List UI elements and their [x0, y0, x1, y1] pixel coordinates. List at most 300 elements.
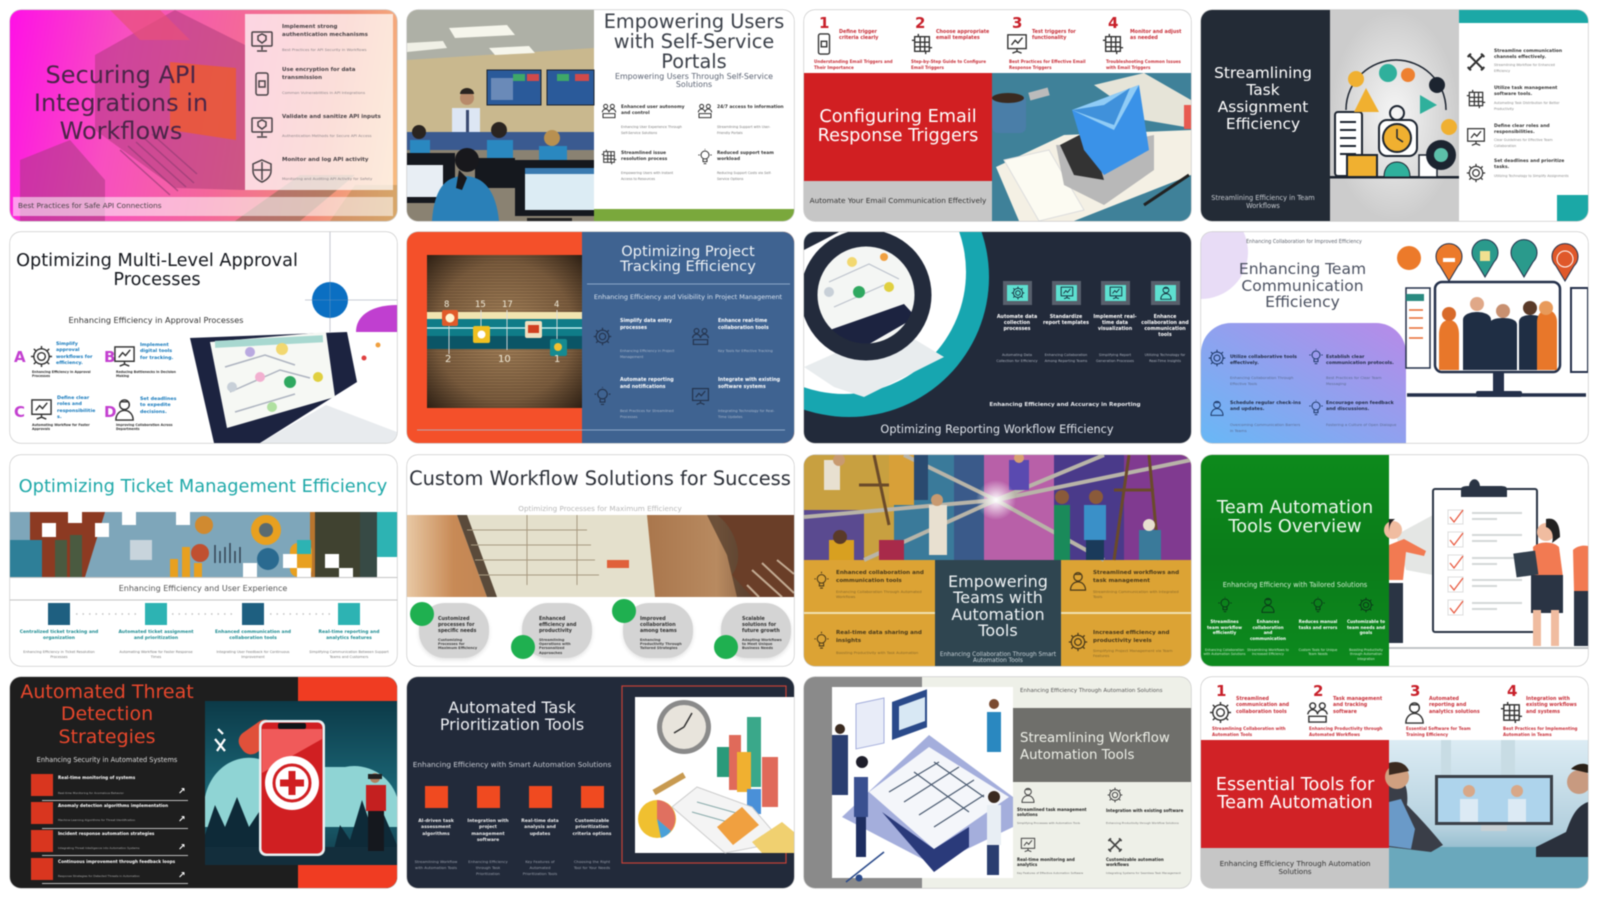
step 2: [1042, 281, 1090, 367]
item: task management: [1017, 787, 1102, 827]
caption: [1009, 59, 1086, 70]
heading: assessment: [421, 825, 451, 830]
caption: Access to Resources: [621, 177, 655, 181]
letter: A: [14, 348, 26, 366]
photo: analyst at screen: [407, 455, 794, 666]
heading: [13, 630, 105, 642]
heading: report templates: [1043, 321, 1089, 326]
title: Tools: [978, 621, 1018, 640]
illustration: team on monitor: [1201, 232, 1588, 443]
heading: [936, 28, 990, 41]
caption: Business Needs: [742, 646, 773, 650]
heading: [1017, 806, 1087, 816]
heading: reporting and: [1429, 703, 1466, 708]
icon tile: [145, 603, 167, 625]
heading: [1017, 856, 1075, 866]
caption: Simplifying Report: [1099, 353, 1131, 357]
caption: Enhancing Efficiency in Project: [620, 349, 674, 353]
heading: Define clear roles and: [1494, 124, 1550, 129]
heading: productivity: [539, 629, 572, 634]
item: integrate: [691, 378, 790, 420]
title: Automation Tools: [1020, 748, 1134, 763]
number: 4: [1108, 14, 1118, 32]
caption: Best Practices for Implementing: [1503, 726, 1577, 731]
caption: Authentication Methods for Secure API Access: [282, 133, 372, 138]
caption: Features: [1093, 653, 1109, 658]
caption: [1309, 726, 1382, 737]
heading: [566, 819, 618, 838]
caption: with Automation Solutions: [1204, 652, 1246, 656]
heading: organization: [43, 636, 75, 641]
title: [7, 252, 307, 290]
step 4: [1500, 683, 1588, 740]
icon: [1260, 597, 1276, 613]
caption: Machine Learning Algorithms for Threat Identification: [58, 818, 135, 822]
caption: Enhancing Efficiency in Approval: [32, 370, 91, 374]
icon: bulb: [813, 631, 830, 651]
panel: Optimizing Reporting Workflow Efficiency: [804, 232, 1191, 443]
heading: [57, 396, 95, 421]
heading: Customized: [438, 617, 470, 622]
title: Team Automation: [1217, 793, 1373, 813]
item: incident: [31, 830, 188, 857]
title: [1195, 498, 1395, 536]
heading: [1093, 569, 1179, 585]
heading: [410, 819, 462, 838]
caption: [620, 409, 674, 420]
item: validate: [250, 113, 382, 138]
caption: Prioritization Tools: [523, 871, 557, 876]
heading: [1093, 629, 1170, 645]
panel: Empowering Teams with Automation Tools: [804, 455, 1191, 666]
heading: [1326, 355, 1394, 367]
heading: responsibilities.: [1494, 130, 1535, 135]
item: encryption: [254, 66, 366, 96]
caption: Approaches: [539, 651, 562, 655]
icon tile: [31, 774, 53, 796]
title: Teams with: [953, 588, 1043, 607]
title: Automated Task: [448, 698, 576, 716]
heading: collaboration tools: [229, 636, 277, 641]
title: Automated Threat: [20, 680, 194, 702]
caption: Streamlining Workflows to: [1247, 648, 1289, 652]
caption: [910, 58, 986, 71]
step 4: [1102, 15, 1191, 73]
caption: Collaboration: [1494, 144, 1516, 148]
heading: [1091, 315, 1139, 333]
caption: [836, 588, 922, 598]
caption: Email Triggers: [911, 65, 944, 70]
caption: [462, 859, 514, 877]
heading: [514, 819, 566, 838]
panel: Optimizing Ticket Management Efficiency: [10, 455, 397, 666]
caption: [110, 650, 202, 661]
caption: Times: [151, 655, 161, 659]
panel: Enhancing Team Communication Efficiency: [1201, 232, 1588, 443]
subtitle: Enhancing Efficiency and Visibility in Project Management: [594, 293, 782, 301]
bubble: [623, 603, 693, 658]
caption: with Email Triggers: [1106, 65, 1150, 70]
caption: Workflows: [836, 594, 855, 598]
heading: [1296, 619, 1340, 630]
caption: Streamlining Communication with Integrated: [1093, 588, 1179, 594]
heading: and: [1264, 630, 1272, 635]
heading: specific needs: [438, 629, 476, 634]
heading: [282, 66, 356, 81]
heading: efficiency.: [56, 361, 83, 366]
title: [898, 574, 1098, 640]
caption: Automating Workflow for Faster: [32, 423, 90, 427]
heading: [438, 617, 476, 636]
subtitle: Enhancing Efficiency in Approval Processes: [69, 315, 243, 325]
icon: devices: [817, 32, 831, 56]
heading: Increased efficiency and: [1093, 630, 1170, 636]
item: centralized: [13, 603, 105, 663]
heading: efficiently: [1213, 630, 1236, 635]
caption: Utilizing Technology for: [1145, 353, 1185, 357]
panel: Custom Workflow Solutions for Success: [407, 455, 794, 666]
item: anomaly: [31, 802, 188, 829]
caption: Integrating User Feedback for Continuous: [216, 650, 290, 654]
caption: [993, 352, 1041, 364]
caption: Service Options: [717, 177, 743, 181]
item: 24/7 access: [697, 103, 784, 135]
title: [7, 680, 207, 748]
heading: criteria clearly: [839, 36, 878, 41]
title: Prioritization Tools: [440, 714, 584, 734]
caption: [514, 859, 566, 877]
icon: [1310, 597, 1326, 613]
timeline labels: 2: [445, 354, 451, 365]
title: Automation: [951, 605, 1045, 624]
heading: transmission: [282, 75, 322, 81]
caption: Boosting Productivity: [1349, 648, 1383, 652]
heading: resolution process: [621, 157, 667, 162]
item: customizable: [1344, 597, 1388, 663]
heading: for tracking.: [140, 356, 173, 361]
heading: [620, 378, 674, 391]
caption: Tailored Strategies: [640, 646, 677, 650]
title: Efficiency: [1226, 114, 1300, 132]
caption: [1326, 375, 1382, 386]
timeline labels: 1: [554, 354, 560, 365]
caption: Understanding Email Triggers and: [814, 59, 893, 64]
item: AI assessment: [410, 786, 462, 876]
title: Integrations in: [34, 89, 208, 117]
heading: Streamlines: [1210, 619, 1239, 624]
caption: [742, 638, 782, 651]
heading: [640, 617, 677, 636]
title: Enhancing Team: [1239, 260, 1366, 278]
photo: desk icons with checker overlay: [10, 455, 397, 666]
title: Strategies: [58, 726, 156, 748]
heading: Implement: [140, 343, 169, 348]
heading: Incident response automation strategies: [58, 831, 154, 836]
item A: [14, 342, 100, 380]
step 4: [1141, 281, 1189, 367]
icon: checked monitor: [250, 116, 274, 138]
caption: Streamlining Workflow for Enhanced: [1494, 63, 1555, 67]
heading: existing workflows: [1526, 703, 1577, 708]
caption: Essential Software for Team: [1406, 726, 1471, 731]
caption: Simplifying Communication Between Support: [309, 650, 389, 654]
item: custom workflows: [1106, 837, 1191, 877]
heading: and systems: [1526, 710, 1560, 715]
icon: phone: [254, 72, 270, 96]
item B: [104, 343, 188, 379]
heading: workflows: [1106, 862, 1129, 866]
caption: Teams and Customers: [330, 655, 368, 659]
item: customizable: [566, 786, 618, 876]
icon: chip: [691, 327, 710, 346]
subtitle: Best Practices for Safe API Connections: [18, 201, 162, 210]
bubble: [522, 603, 592, 658]
title: Securing API: [46, 61, 196, 89]
heading: Enhance: [1154, 315, 1176, 320]
heading: Real-time reporting and: [319, 630, 379, 635]
item: support workload: [698, 148, 774, 181]
heading: Enhanced collaboration and: [836, 570, 924, 576]
heading: Automated ticket assignment: [118, 630, 194, 635]
icon: board: [1466, 127, 1486, 147]
item: efficiency: [1068, 629, 1188, 663]
heading: Enhances: [1257, 619, 1279, 624]
caption: [1091, 352, 1139, 364]
illustration: checklist clipboard team: [1201, 455, 1588, 666]
heading: [1344, 619, 1388, 636]
title: [818, 106, 978, 146]
caption: Enhancing Collaboration Through: [1230, 375, 1293, 380]
arrow: ↗: [178, 871, 186, 881]
heading: tasks.: [1494, 165, 1509, 170]
heading: authentication mechanisms: [282, 32, 368, 38]
heading: Continuous improvement through feedback loops: [58, 859, 175, 864]
caption: Enhancing Efficiency: [468, 859, 508, 864]
caption: Making: [116, 374, 129, 378]
caption: [1406, 726, 1471, 737]
icon tile: [1150, 281, 1180, 305]
icon tile: [476, 786, 500, 808]
heading: Real-time data sharing and: [836, 630, 922, 636]
caption: Step-by-Step Guide to Configure: [911, 59, 986, 64]
title: Processes: [113, 270, 201, 290]
illustration: timeline on wood: [407, 232, 794, 443]
photo: video conference meeting: [1201, 677, 1588, 888]
illustration: email on desk: [803, 72, 1192, 222]
subtitle: Automate Your Email Communication Effectively: [810, 196, 986, 205]
heading: collaboration tools: [718, 326, 769, 331]
caption: Tools: [1093, 594, 1102, 598]
icon: chess: [1068, 571, 1088, 591]
item: reporting: [303, 603, 395, 663]
heading: workflows for: [56, 355, 92, 360]
heading: workload: [717, 157, 740, 162]
caption: Streamlining: [539, 638, 564, 642]
icon: shield: [252, 158, 272, 184]
subtitle: Empowering Users Through Self-Service: [615, 72, 773, 80]
icon tile: [1052, 281, 1080, 305]
heading: and tracking: [1333, 703, 1367, 708]
illustration: stopwatch and charts: [407, 677, 794, 888]
caption: [814, 58, 893, 70]
icon tile: [242, 603, 264, 625]
item: customized: [410, 599, 492, 659]
caption: Processes: [32, 374, 50, 378]
heading: Implement real-: [1093, 315, 1137, 320]
caption: [1141, 352, 1189, 364]
heading: and prioritization: [134, 636, 178, 641]
caption: in Teams: [1230, 428, 1247, 433]
panel: Automated Threat Detection Strategies: [10, 677, 397, 888]
subtitle: Enhancing Efficiency with Tailored Solutions: [1223, 581, 1367, 589]
heading: [1494, 124, 1550, 135]
caption: Departments: [116, 427, 140, 431]
heading: Simplify data entry: [620, 319, 672, 324]
heading: analytics features: [326, 636, 372, 641]
icon: people gear: [1306, 701, 1329, 724]
heading: channels effectively.: [1494, 55, 1546, 60]
icon: worker: [113, 398, 136, 421]
heading: approval: [56, 348, 80, 353]
caption: Automating Workflow for Faster Response: [119, 650, 193, 654]
caption: Maximum Efficiency: [438, 646, 477, 650]
caption: [32, 423, 90, 431]
heading: [1429, 697, 1480, 716]
heading: goals: [1360, 630, 1372, 635]
heading: [140, 343, 173, 362]
item: communication: [1466, 49, 1584, 75]
caption: [566, 859, 618, 871]
caption: Reducing Support Costs via Self-: [717, 171, 771, 175]
panel: Streamlining Workflow Automation Tools: [804, 677, 1191, 888]
heading: [1032, 30, 1076, 43]
heading: among teams: [640, 629, 677, 634]
heading: algorithms: [422, 832, 450, 837]
caption: Increased Efficiency: [1252, 652, 1284, 656]
caption: Integration: [1357, 657, 1375, 661]
caption: Operations with: [539, 642, 571, 646]
item: protocols: [1308, 355, 1404, 389]
heading: processes for: [438, 623, 474, 628]
caption: [718, 409, 775, 420]
caption: [716, 125, 770, 135]
caption: Best Practices for Clear Team: [1326, 375, 1382, 380]
icon: people: [601, 103, 617, 119]
caption: [1344, 648, 1388, 661]
heading: and updates.: [1230, 407, 1264, 412]
heading: collaboration tools: [1236, 710, 1287, 715]
heading: team workflow: [1207, 625, 1242, 630]
heading: project: [479, 825, 497, 830]
caption: [1296, 648, 1340, 657]
heading: [718, 319, 769, 332]
heading: Utilize collaborative tools: [1230, 355, 1297, 360]
heading: Enhanced communication and: [215, 630, 291, 635]
title: Configuring Email: [819, 106, 977, 126]
heading: efficiency and: [539, 623, 576, 628]
item: collaboration: [612, 599, 696, 659]
heading: Automated: [1429, 697, 1459, 702]
number: 3: [1012, 14, 1022, 32]
footer bar: [13, 197, 393, 216]
caption: Among Reporting Teams: [1045, 359, 1087, 363]
item: integration: [1106, 787, 1191, 827]
caption: Clear Guidelines for Effective Team: [1494, 138, 1553, 142]
heading: decisions.: [140, 410, 167, 415]
icon: chip: [601, 149, 617, 165]
panel: Configuring Email Response Triggers: [804, 10, 1191, 221]
heading: digital tools: [140, 349, 172, 354]
number: 2: [915, 14, 925, 32]
heading: Integration with existing software: [1106, 808, 1183, 812]
heading: analytics solutions: [1429, 710, 1480, 715]
caption: Collection for Efficiency: [996, 359, 1038, 363]
subtitle: Enhancing Efficiency Through Automation Solutions: [1020, 688, 1162, 694]
caption: Management: [620, 355, 643, 359]
caption: Choosing the Right: [574, 859, 610, 864]
caption: [1212, 726, 1286, 737]
subtitle: Solutions: [1278, 867, 1312, 876]
illustration: task clock and gears: [1201, 10, 1588, 221]
icon: tools: [1466, 52, 1486, 72]
heading: [207, 630, 299, 642]
heading: communication protocols.: [1326, 361, 1394, 366]
caption: Enhancing Efficiency in Ticket Resolution: [23, 650, 95, 654]
panel: Streamlining Task Assignment Efficiency: [1201, 10, 1588, 221]
subtitle: Enhancing Collaboration for Improved Efficiency: [1246, 240, 1362, 245]
icon: team gear: [1209, 701, 1232, 724]
heading: Real-time monitoring of systems: [58, 775, 135, 780]
heading: as needed: [1130, 36, 1158, 41]
caption: [1106, 59, 1181, 70]
icon: chip: [1466, 89, 1486, 109]
item: efficiency: [510, 599, 594, 659]
caption: [1494, 63, 1555, 74]
heading: [1494, 86, 1557, 97]
caption: [13, 650, 105, 661]
title: [604, 10, 784, 73]
heading: [836, 629, 922, 645]
heading: Integration with: [1526, 697, 1570, 702]
item: collaboration: [1246, 597, 1290, 663]
subtitle: Enhancing Security in Automated Systems: [37, 756, 177, 764]
heading: Scalable: [742, 617, 765, 622]
caption: Streamlining Workflow: [415, 859, 457, 864]
heading: [1494, 159, 1564, 170]
icon: secure monitor: [250, 30, 274, 52]
heading: [1202, 619, 1246, 636]
heading: Customizable: [575, 819, 609, 824]
caption: Best Practices for API Security in Workflows: [282, 47, 367, 52]
item: authentication: [250, 23, 368, 52]
icon: team gear: [1466, 163, 1486, 183]
heading: insights: [836, 638, 861, 644]
caption: Simplifying Processes with Automation Tools: [1017, 820, 1080, 824]
photo: support control room: [406, 10, 795, 222]
heading: team needs and: [1347, 625, 1385, 630]
panel: Optimizing Project Tracking Efficiency: [407, 232, 794, 443]
heading: [1141, 315, 1189, 339]
caption: through Task: [476, 865, 500, 870]
caption: Utilizing Technology to Simplify Assignments: [1494, 174, 1569, 178]
icon: team: [1208, 349, 1226, 367]
heading: Integration with: [467, 819, 509, 824]
caption: Improving Collaboration Across: [116, 423, 173, 427]
heading: collaboration and: [1141, 321, 1189, 326]
item: deadlines: [1466, 159, 1584, 185]
caption: Fostering a Culture of Open Dialogue: [1326, 422, 1396, 427]
caption: with Automation Tools: [415, 865, 457, 870]
